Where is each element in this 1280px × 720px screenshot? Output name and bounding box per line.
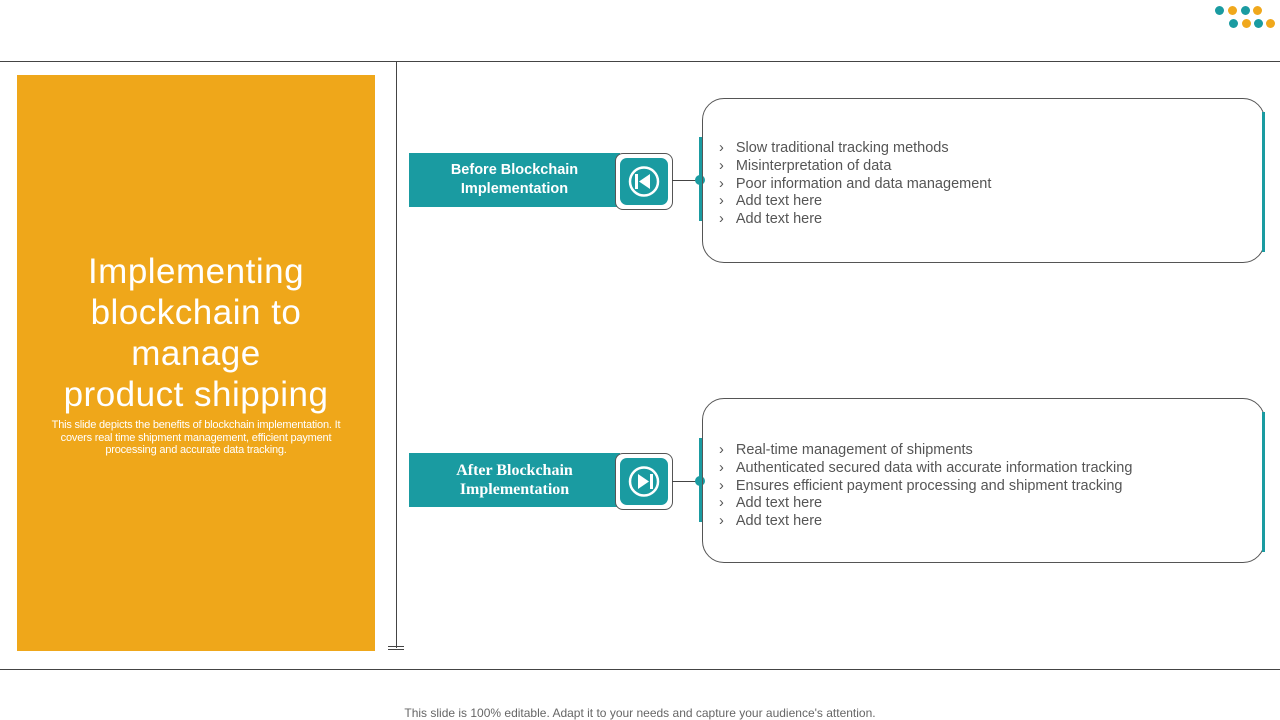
card: before: Slow traditional tracking methods bbox=[736, 140, 949, 156]
title bbox=[64, 252, 328, 414]
label: after: Implementation bbox=[460, 481, 569, 498]
card: after bbox=[702, 398, 1265, 563]
label: after: After Blockchain bbox=[456, 462, 573, 479]
icon: rewind bbox=[615, 153, 673, 210]
card: after: Real-time management of shipments bbox=[736, 442, 973, 458]
title: manage bbox=[131, 334, 261, 373]
title: product shipping bbox=[64, 375, 328, 414]
card: before: Add text here bbox=[736, 211, 822, 227]
card: after: Add text here bbox=[736, 495, 822, 511]
title: blockchain to bbox=[91, 293, 301, 332]
label: before: Implementation bbox=[461, 181, 568, 197]
description: This slide depicts the benefits of blockchain implementation. It covers real time shipment management, efficient payment processing and accurate data tracking. bbox=[52, 419, 340, 456]
card: after: Authenticated secured data with accurate information tracking bbox=[736, 460, 1132, 476]
label: before: Before Blockchain bbox=[451, 162, 578, 178]
card: before: Misinterpretation of data bbox=[736, 158, 891, 174]
label: before bbox=[409, 153, 620, 207]
icon: forward bbox=[615, 453, 673, 510]
card: before: Poor information and data management bbox=[736, 176, 991, 192]
title: Implementing bbox=[88, 252, 304, 291]
footer: This slide is 100% editable. Adapt it to your needs and capture your audience's attention. bbox=[404, 706, 876, 720]
label: after bbox=[409, 453, 620, 507]
logo dots bbox=[1215, 6, 1275, 28]
card: before bbox=[702, 98, 1265, 263]
card: after: Ensures efficient payment processing and shipment tracking bbox=[736, 478, 1122, 494]
card: before: Add text here bbox=[736, 193, 822, 209]
panel: title bbox=[17, 75, 375, 651]
card: after: Add text here bbox=[736, 513, 822, 529]
